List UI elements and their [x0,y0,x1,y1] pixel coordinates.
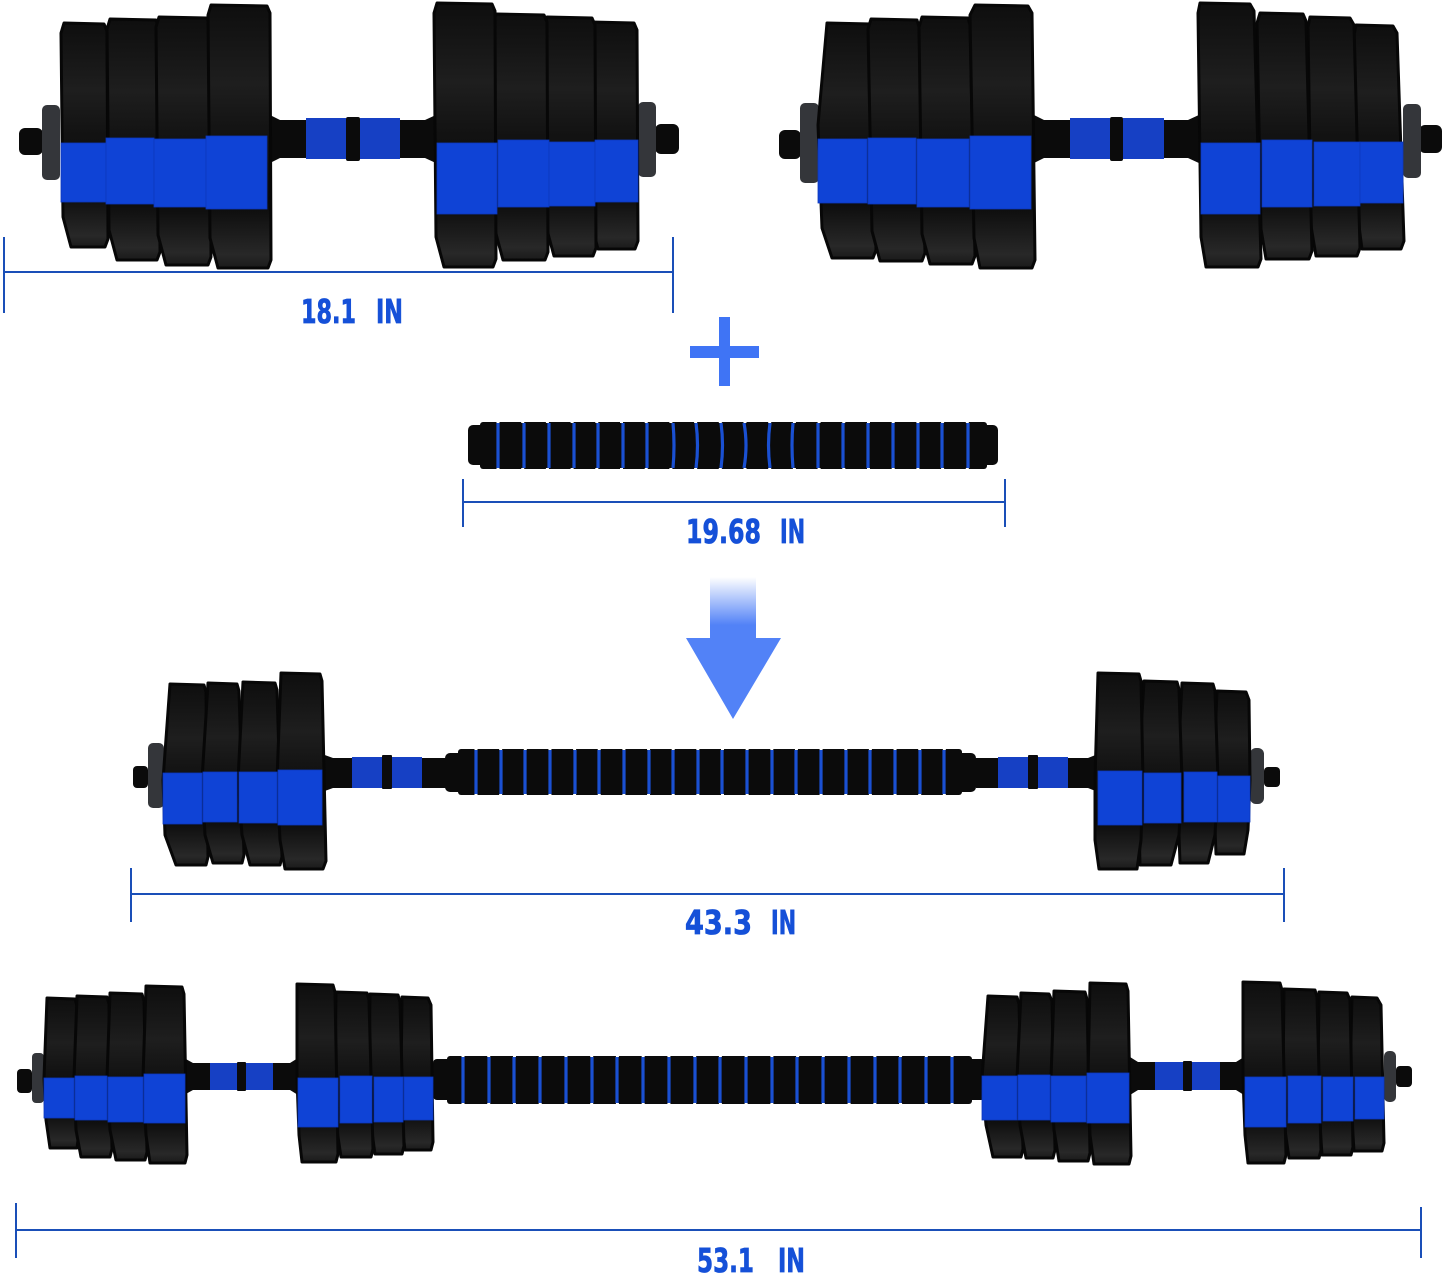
weight plates left [61,5,271,268]
barbell: 43.3 in [133,673,1280,869]
dimension line: 53.1 in [16,1203,1421,1258]
dimension line: 18.1 in [4,237,673,313]
dumbbell: top left [19,3,679,268]
barbell: 53.1 in [17,982,1412,1164]
weight plates right [1198,3,1404,267]
connecting bar foam grip [468,422,998,469]
end nut and collar left [19,105,60,180]
grip stripes [462,1056,954,1104]
foam grip [433,1056,985,1104]
end nut and collar left [779,103,819,183]
end nut and collar right [1250,748,1280,804]
handle [268,114,438,164]
end nut and collar right [638,102,679,177]
weight plates right [434,3,638,267]
label: 18.1 in: 18.1 [301,292,356,331]
end nut and collar left [133,743,164,808]
foam grip [445,749,976,795]
right dumbbell plates, outer set [1243,982,1384,1163]
grip stripes [474,749,946,795]
left dumbbell plates, outer set [44,986,187,1163]
grip stripes [496,422,970,469]
right handle [1130,1057,1244,1095]
end nut and collar right [1403,104,1442,178]
dimension line: 43.3 in [131,868,1284,922]
left handle [322,754,446,792]
dimension line: 19.68 in [463,479,1005,527]
label: 43.3 in: IN [771,903,796,942]
right dumbbell nut and collar [1384,1051,1412,1102]
right dumbbell plates, inner set [982,983,1131,1164]
left dumbbell plates, inner set [297,984,433,1162]
weight plates right [1095,673,1250,869]
right handle [976,754,1098,792]
label: 19.68 in: IN [780,512,805,551]
weight plates left [163,673,326,869]
handle [1032,114,1201,164]
left dumbbell nut and collar [17,1053,44,1103]
label: 18.1 in: IN [376,292,403,331]
label: 43.3 in: 43.3 [685,903,752,942]
left handle [184,1058,298,1095]
label: 19.68 in: 19.68 [686,512,761,551]
arrow pointing down [686,577,781,719]
dumbbell: top right [779,3,1442,268]
weight plates left [818,5,1035,268]
plus sign [690,317,759,386]
